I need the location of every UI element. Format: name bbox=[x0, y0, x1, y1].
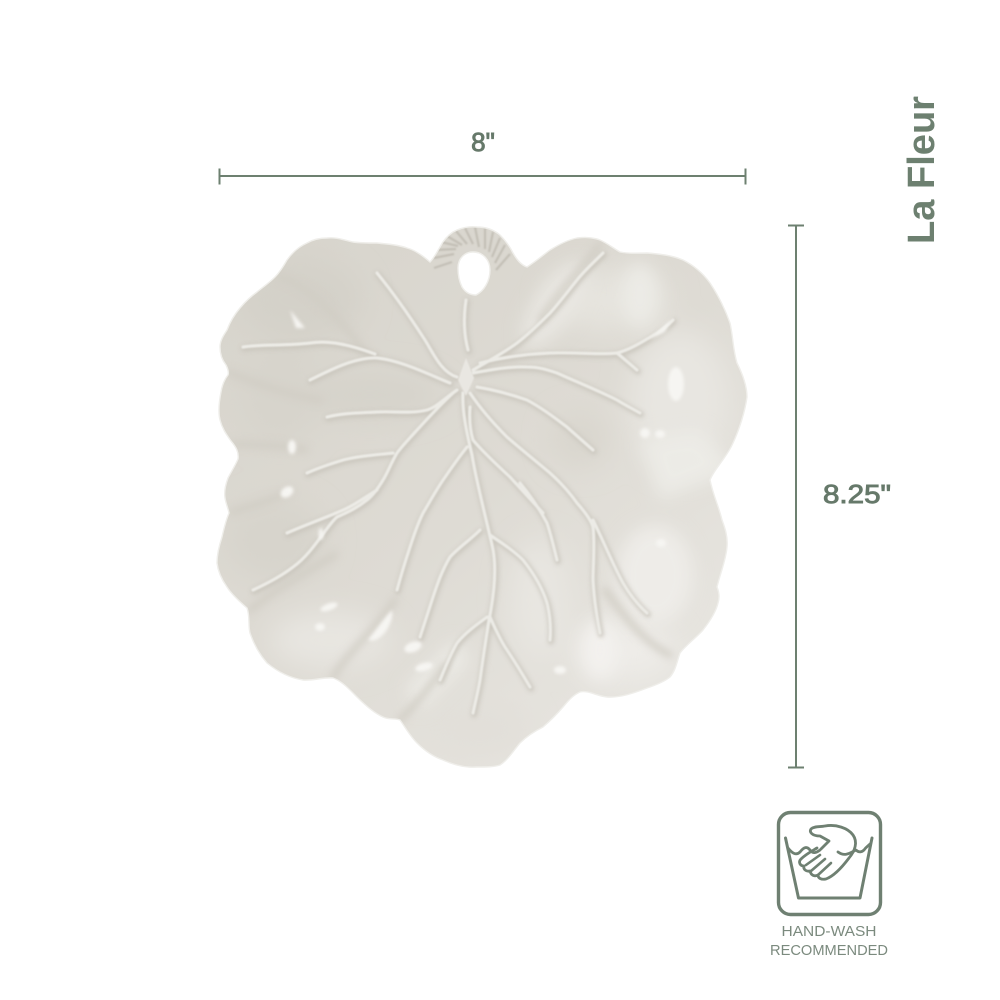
fold shadows bbox=[228, 245, 670, 720]
rope handle strands bbox=[434, 227, 510, 270]
care label text: RECOMMENDED bbox=[770, 943, 888, 959]
centre hub bbox=[458, 358, 474, 396]
width label: 8" bbox=[471, 127, 495, 157]
soft shading bbox=[281, 278, 716, 670]
care label text bbox=[770, 924, 888, 959]
icon: hand-wash care symbol bbox=[778, 812, 880, 914]
height dimension line bbox=[788, 225, 804, 768]
brand name, rotated: La Fleur bbox=[901, 96, 943, 244]
width dimension line bbox=[220, 168, 746, 184]
glaze highlights bbox=[278, 310, 684, 674]
plate: white leaf-shaped dish bbox=[217, 227, 747, 767]
care label text: HAND-WASH bbox=[782, 924, 876, 940]
height label: 8.25" bbox=[823, 479, 891, 509]
vein ridges bbox=[243, 253, 673, 713]
rim bbox=[217, 227, 747, 767]
vein shadows bbox=[244, 254, 674, 714]
